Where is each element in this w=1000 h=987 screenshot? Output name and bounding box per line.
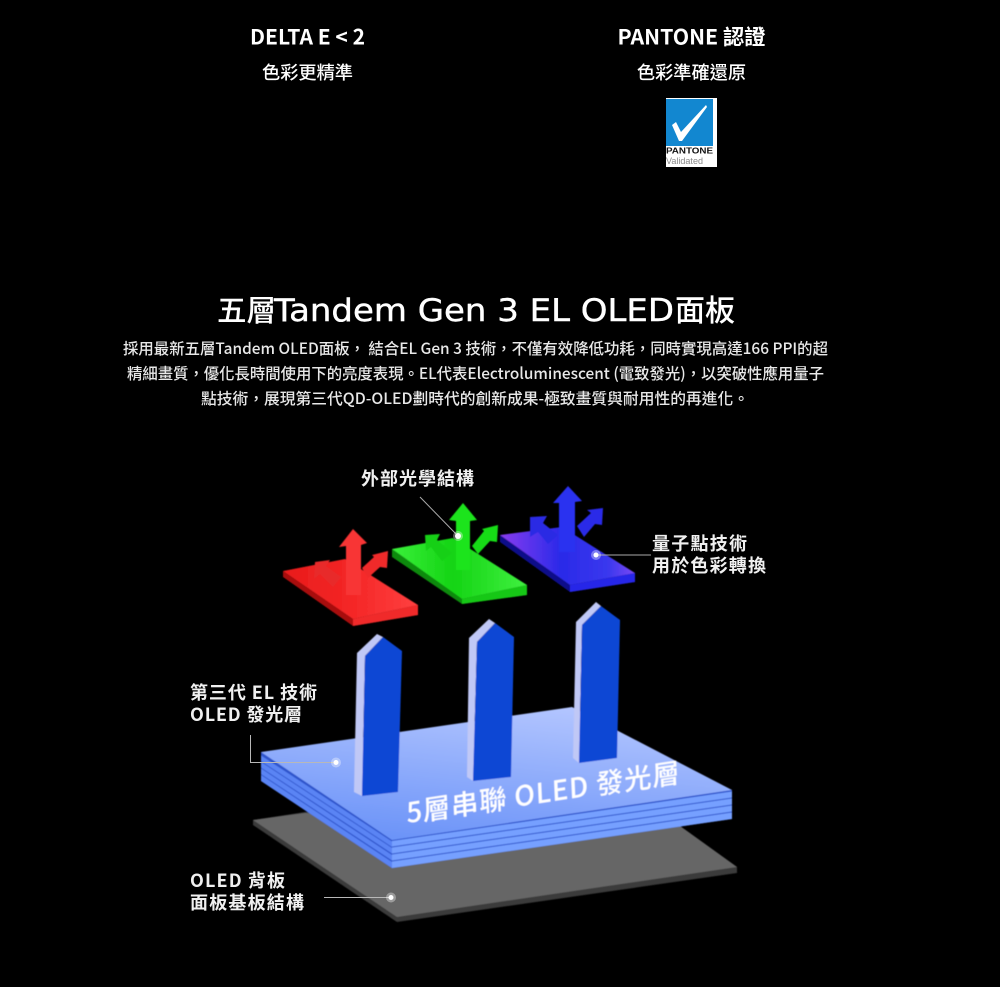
pillar: right xyxy=(573,602,620,763)
plate: green optical structure xyxy=(392,503,527,604)
heading: Pantone: PANTONE 認證 xyxy=(618,22,766,52)
callout: external optical structure: 外部光學結構 xyxy=(361,465,474,491)
callout: OLED backplane xyxy=(190,867,396,915)
panel text: five-layer tandem: 5層串聯 OLED 發光層 xyxy=(406,750,680,831)
block: Delta E xyxy=(250,22,365,85)
text block: description: 精細畫質，優化長時間使用下的亮度表現。EL代表Electroluminescent (電致發光)，以突破性應用量子 xyxy=(127,362,824,384)
plate: blue optical structure xyxy=(500,486,635,592)
icon: Pantone validated badge: Validated xyxy=(666,156,703,167)
icon: Pantone validated badge xyxy=(666,98,717,167)
title xyxy=(217,286,735,330)
text block: description: 點技術，展現第三代QD-OLED劃時代的創新成果-極致畫質與耐用性的再進化。 xyxy=(201,387,749,409)
title: Tandem Gen 3 EL OLED xyxy=(273,293,674,329)
text block: description: 採用最新五層Tandem OLED面板， 結合EL Gen 3 技術，不僅有效降低功耗，同時實現高達166 PPI的超 xyxy=(123,337,828,359)
callout: third-generation EL OLED layer: OLED 發光層 xyxy=(190,701,302,727)
callout: quantum dot technology: 量子點技術 xyxy=(652,530,747,556)
title: 面板 xyxy=(675,286,735,330)
heading: Delta E: DELTA E < 2 xyxy=(250,22,365,52)
callout: third-generation EL OLED layer xyxy=(190,679,341,768)
pillar: left xyxy=(354,634,402,796)
caption: Delta E: 色彩更精準 xyxy=(262,59,353,85)
pillar: centre xyxy=(467,619,514,781)
text block: description xyxy=(123,337,828,409)
panel: five OLED layers xyxy=(261,707,732,868)
plate: red optical structure xyxy=(283,529,418,626)
callout: OLED backplane: OLED 背板 xyxy=(190,867,285,893)
diagram: layered OLED panel xyxy=(253,486,737,922)
caption: Pantone: 色彩準確還原 xyxy=(637,59,746,85)
callout: OLED backplane: 面板基板結構 xyxy=(190,889,304,915)
title: 五層 xyxy=(217,288,276,330)
panel: grey backplane xyxy=(253,812,737,922)
block: Pantone xyxy=(618,22,766,167)
callout: quantum dot technology: 用於色彩轉換 xyxy=(652,552,766,578)
callout: external optical structure xyxy=(361,465,474,541)
callout: third-generation EL OLED layer: 第三代 EL 技術 xyxy=(190,679,317,705)
icon: Pantone validated badge: PANTONE xyxy=(666,146,714,156)
callout: quantum dot technology xyxy=(591,530,766,578)
